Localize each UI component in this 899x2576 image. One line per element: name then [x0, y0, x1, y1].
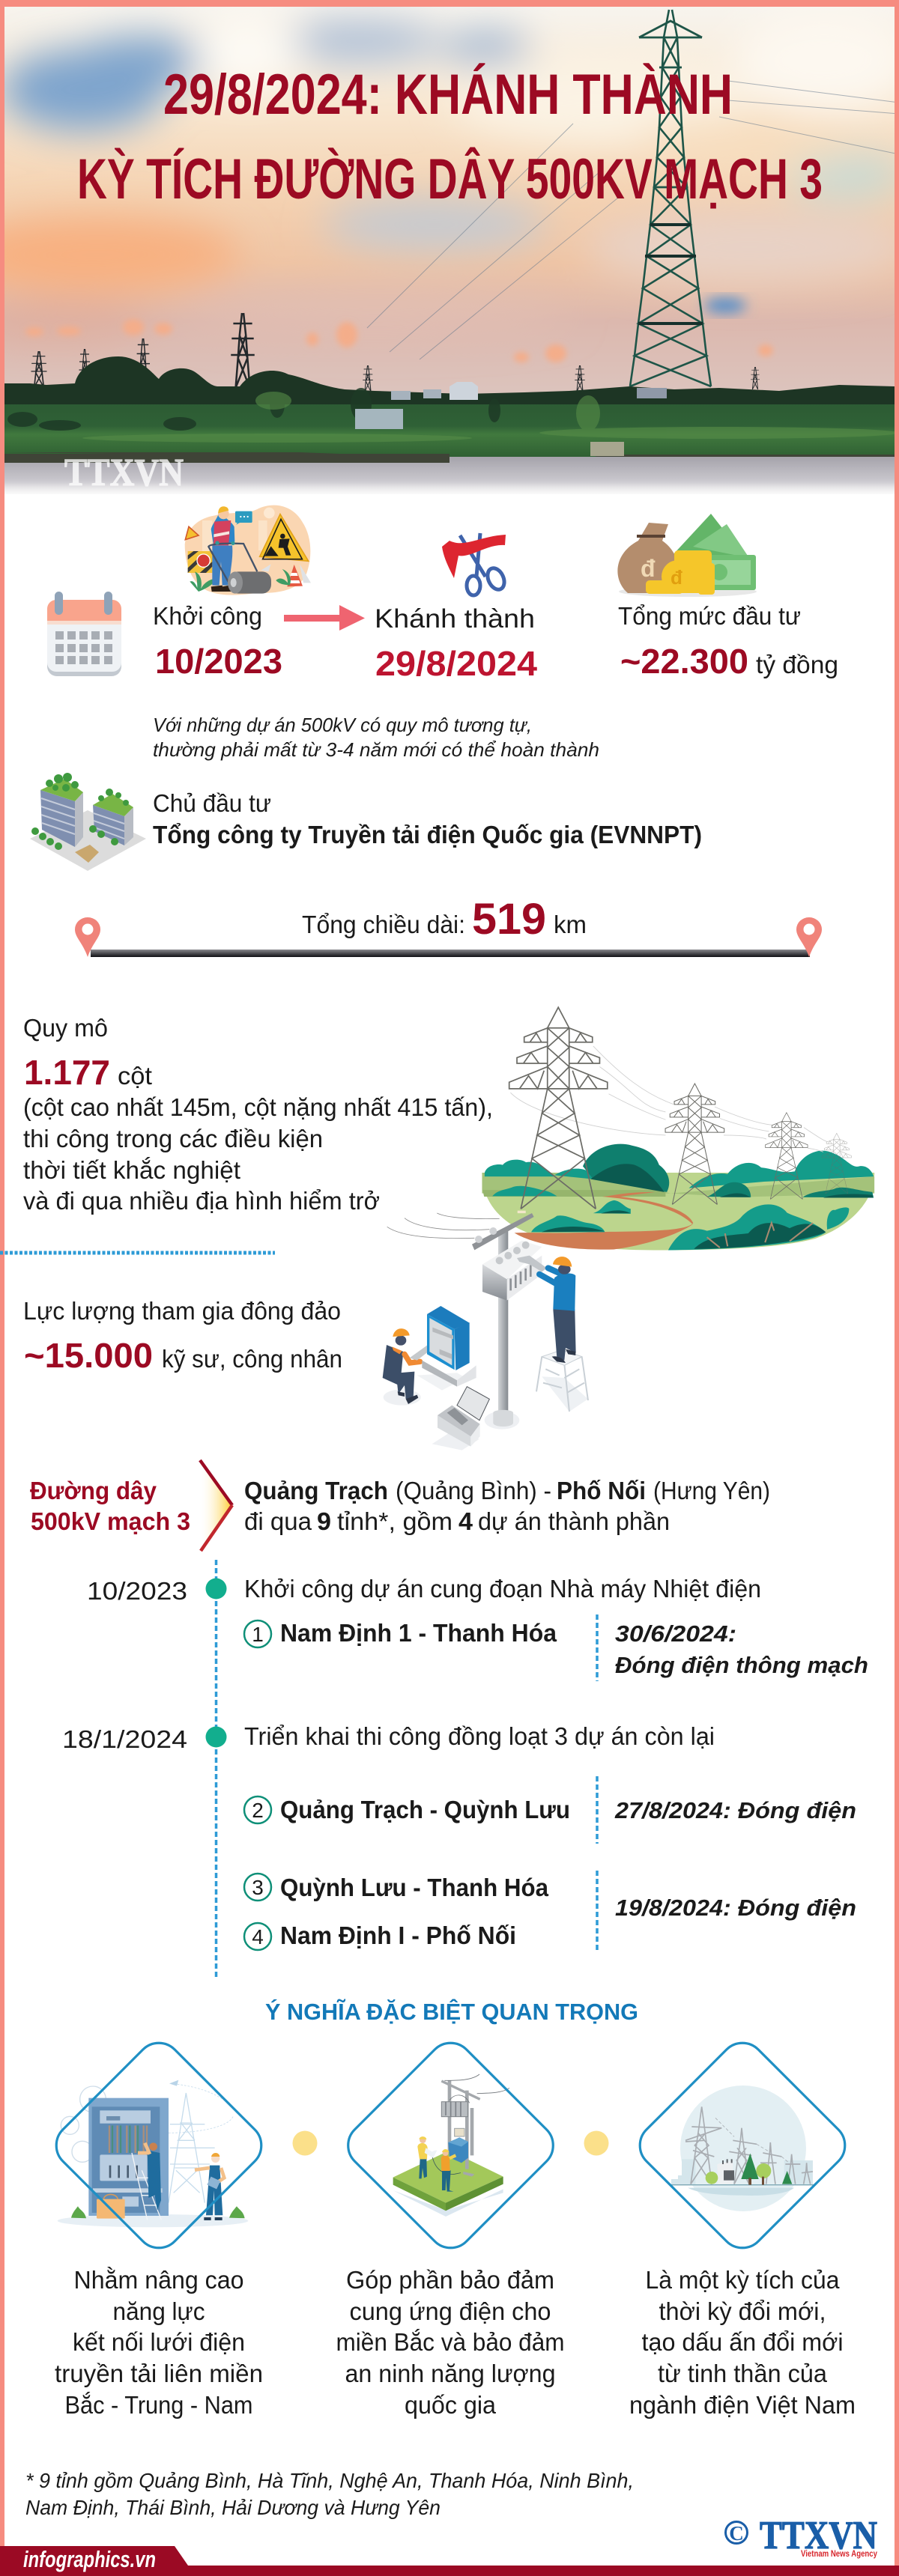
significance text 3: tạo dấu ấn đổi mới: [641, 2328, 844, 2356]
route description: tỉnh*, gồm: [337, 1507, 452, 1535]
icon: scissors and ribbon: [442, 533, 507, 595]
significance text 2: an ninh năng lượng: [345, 2360, 556, 2387]
yellow separator dots: [292, 2131, 608, 2155]
significance text 2: [336, 2266, 565, 2419]
houses: [391, 382, 667, 400]
significance text 3: từ tinh thần của: [658, 2360, 828, 2387]
scale block: và đi qua nhiều địa hình hiểm trở: [23, 1187, 380, 1215]
logo: TTXVN: TTXVN: [760, 2514, 877, 2557]
significance text 2: Góp phần bảo đảm: [346, 2266, 554, 2294]
significance text 1: truyền tải liên miền: [55, 2360, 263, 2387]
route description: [244, 1477, 770, 1535]
scale block: Quy mô: [23, 1014, 108, 1042]
route description: dự án thành phần: [478, 1507, 670, 1535]
illustration: transmission towers in landscape: [482, 1007, 874, 1250]
start date block: 10/2023: [155, 642, 282, 681]
dotted divider: [0, 1251, 275, 1255]
route description: 4: [458, 1507, 473, 1535]
icon: money bag, coins and notes: đ: [671, 566, 682, 589]
large lattice tower: [630, 10, 711, 386]
total investment block: [618, 602, 838, 681]
illustration: control cabinet and engineers: [58, 2080, 248, 2227]
total length label: [302, 895, 587, 944]
significance text 2: miền Bắc và bảo đảm: [336, 2328, 565, 2356]
timeline entry: 10/2023: Khởi công dự án cung đoạn Nhà máy Nhiệt điện: [244, 1575, 761, 1603]
scale block: thi công trong các điều kiện: [23, 1125, 323, 1152]
total investment block: ~22.300: [620, 642, 748, 681]
route description: (Hưng Yên): [653, 1477, 770, 1504]
project 1: Nam Định 1 - Thanh Hóa: [280, 1619, 557, 1647]
title: 29/8/2024: KHÁNH THÀNH: [163, 63, 733, 127]
scale block: (cột cao nhất 145m, cột nặng nhất 415 tấn),: [23, 1093, 493, 1121]
significance text 1: năng lực: [112, 2297, 205, 2325]
timeline entry: 18/1/2024: Triển khai thi công đồng loạt 3 dự án còn lại: [244, 1722, 715, 1750]
route description: (Quảng Bình) -: [396, 1477, 551, 1504]
route heading: 500kV mạch 3: [31, 1507, 190, 1535]
italic note: Với những dự án 500kV có quy mô tương tự,: [153, 714, 532, 736]
significance text 1: kết nối lưới điện: [73, 2328, 245, 2356]
icon: money bag, coins and notes: [617, 514, 757, 597]
significance text 2: cung ứng điện cho: [349, 2297, 551, 2325]
route description: Quảng Trạch: [244, 1477, 388, 1504]
inauguration date block: [375, 604, 537, 683]
hero photo: power tower at dusk: [0, 7, 899, 501]
significance text 3: Là một kỳ tích của: [646, 2266, 840, 2294]
start date block: Khởi công: [153, 602, 262, 630]
route heading: [30, 1477, 190, 1535]
total length label: 519: [472, 895, 546, 944]
footnote: * 9 tỉnh gồm Quảng Bình, Hà Tĩnh, Nghệ An, Thanh Hóa, Ninh Bình,: [25, 2469, 634, 2492]
small distant towers: [31, 313, 760, 392]
logo: TTXVN: C: [729, 2522, 744, 2545]
investor block: Tổng công ty Truyền tải điện Quốc gia (EVNNPT): [153, 821, 702, 848]
length bar with location pins: [75, 917, 822, 957]
title: [77, 63, 823, 211]
icon: office buildings: [30, 773, 146, 871]
project 1: 30/6/2024:: [615, 1620, 736, 1647]
projects 3 and 4: Quỳnh Lưu - Thanh Hóa: [280, 1874, 549, 1901]
scale block: cột: [118, 1062, 152, 1090]
diamond frames: [47, 2034, 854, 2257]
italic note: thường phải mất từ 3-4 năm mới có thể hoàn thành: [153, 738, 599, 761]
route description: 9: [317, 1507, 331, 1535]
start date block: [153, 602, 282, 681]
scale block: 1.177: [24, 1053, 110, 1092]
project 2: 27/8/2024: Đóng điện: [614, 1797, 856, 1823]
timeline entry: 18/1/2024: [62, 1722, 715, 1753]
timeline entry: 10/2023: 10/2023: [87, 1577, 187, 1605]
chevron divider: [199, 1460, 232, 1551]
photo watermark TTXVN: TTXVN: [64, 452, 184, 494]
scale block: thời tiết khắc nghiệt: [23, 1156, 240, 1184]
logo: TTXVN: Vietnam News Agency: [801, 2548, 877, 2559]
significance text 3: [629, 2266, 856, 2419]
arrow: start to inauguration: [284, 605, 365, 631]
illustration: workers at electrical pole: [383, 1213, 588, 1450]
total investment block: tỷ đồng: [756, 651, 838, 678]
route heading: Đường dây: [30, 1477, 157, 1504]
footer band: infographics.vn: [23, 2546, 156, 2572]
total length label: km: [554, 911, 587, 938]
projects 3 and 4: 4: [252, 1925, 264, 1948]
project 2: [244, 1776, 856, 1844]
scale block: [23, 1014, 493, 1215]
project 2: Quảng Trạch - Quỳnh Lưu: [280, 1796, 570, 1823]
route description: Phố Nối: [557, 1477, 646, 1504]
projects 3 and 4: 3: [252, 1876, 264, 1899]
inauguration date block: 29/8/2024: [375, 644, 537, 683]
route description: đi qua: [244, 1507, 312, 1535]
icon: road worker: [185, 505, 311, 595]
project 1: Đóng điện thông mạch: [615, 1652, 868, 1678]
footer band: [0, 2546, 899, 2576]
logo: TTXVN: [725, 2514, 877, 2559]
workforce block: Lực lượng tham gia đông đảo: [23, 1297, 341, 1325]
investor block: [153, 789, 702, 848]
timeline spine: [205, 1560, 226, 1977]
illustration: towers and trees in circle: [671, 2086, 814, 2211]
inauguration date block: Khánh thành: [375, 604, 535, 634]
illustration: engineers on green platform: [393, 2074, 509, 2217]
projects 3 and 4: [244, 1871, 856, 1951]
workforce block: [23, 1297, 342, 1375]
projects 3 and 4: 19/8/2024: Đóng điện: [615, 1895, 856, 1921]
footnote: Nam Định, Thái Bình, Hải Dương và Hưng Yên: [25, 2496, 441, 2519]
italic note: [153, 714, 599, 761]
total length label: Tổng chiều dài:: [302, 911, 465, 938]
significance text 1: Nhằm nâng cao: [73, 2266, 244, 2294]
timeline entry: 18/1/2024: 18/1/2024: [62, 1725, 187, 1753]
significance text 1: Bắc - Trung - Nam: [64, 2391, 253, 2419]
workforce block: kỹ sư, công nhân: [162, 1345, 342, 1373]
workforce block: ~15.000: [24, 1336, 153, 1375]
significance text 2: quốc gia: [405, 2391, 497, 2419]
project 2: 2: [252, 1799, 264, 1822]
footnote: [25, 2469, 634, 2519]
projects 3 and 4: Nam Định I - Phố Nối: [280, 1922, 516, 1949]
icon: calendar: [47, 592, 121, 676]
icon: money bag, coins and notes: đ: [641, 555, 656, 582]
significance text 3: thời kỳ đổi mới,: [659, 2297, 826, 2325]
investor block: Chủ đầu tư: [153, 789, 271, 817]
section heading: Ý NGHĨA ĐẶC BIỆT QUAN TRỌNG: [265, 1998, 638, 2025]
project 1: 1: [252, 1623, 264, 1646]
total investment block: Tổng mức đầu tư: [618, 602, 801, 630]
ground and tree line: [4, 356, 899, 464]
significance text 3: ngành điện Việt Nam: [629, 2391, 856, 2419]
timeline entry: 10/2023: [87, 1575, 761, 1605]
project 1: [244, 1614, 868, 1681]
power lines in the sky: [367, 81, 899, 359]
significance text 1: [55, 2266, 263, 2419]
